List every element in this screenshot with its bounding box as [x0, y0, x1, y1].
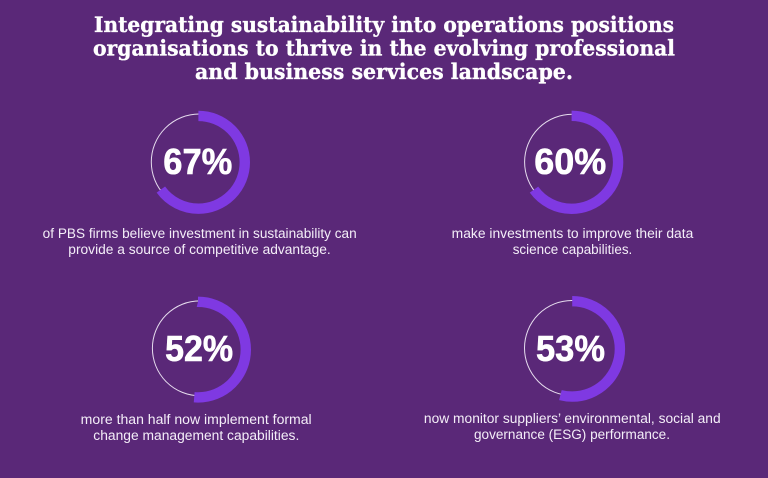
panel: 60% stat	[452, 114, 694, 257]
stat number: 52%: 52%	[165, 328, 233, 369]
title: and business services landscape.	[195, 60, 573, 85]
description: governance (ESG) performance.	[474, 427, 670, 442]
title	[93, 13, 675, 85]
description: of PBS firms believe investment in sustainability can	[43, 226, 357, 241]
description	[43, 226, 357, 257]
stat number: 60%: 60%	[534, 141, 606, 182]
donut chart: 67%	[151, 114, 247, 210]
panel: 52% stat	[81, 301, 312, 443]
panel: 53% stat	[424, 300, 721, 442]
donut chart: 60%	[525, 114, 620, 210]
description	[452, 226, 694, 257]
description: provide a source of competitive advantage.	[68, 242, 331, 257]
description: science capabilities.	[513, 242, 632, 257]
stat number: 53%: 53%	[536, 328, 605, 369]
panel: 67% stat	[43, 114, 357, 257]
description: change management capabilities.	[93, 428, 299, 443]
description: more than half now implement formal	[81, 412, 312, 427]
donut chart: 52%	[150, 301, 247, 397]
description	[81, 412, 312, 443]
donut chart: 53%	[524, 300, 620, 397]
description	[424, 411, 721, 442]
title: Integrating sustainability into operations positions	[94, 13, 674, 38]
description: make investments to improve their data	[452, 226, 694, 241]
stat number: 67%: 67%	[163, 141, 232, 182]
title: organisations to thrive in the evolving professional	[93, 36, 675, 62]
description: now monitor suppliers’ environmental, social and	[424, 411, 721, 426]
